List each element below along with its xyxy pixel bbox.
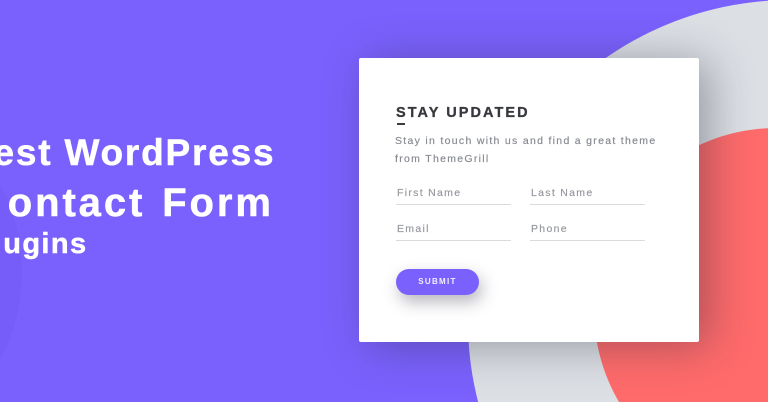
description: from ThemeGrill (395, 153, 490, 165)
description (395, 135, 656, 165)
faint left circle (0, 184, 22, 360)
heading underline (397, 123, 405, 125)
title (0, 132, 275, 260)
submit button (396, 269, 479, 295)
grey circle (468, 1, 768, 402)
panel: form card (359, 58, 699, 342)
heading: STAY UPDATED (396, 105, 530, 121)
field: first name: First Name (397, 187, 461, 199)
submit button: SUBMIT (418, 277, 457, 286)
field: phone: Phone (531, 223, 568, 235)
field: email: Email (397, 223, 430, 235)
description: Stay in touch with us and find a great theme (395, 135, 656, 147)
field: last name: Last Name (531, 187, 593, 199)
red circle (594, 128, 768, 402)
